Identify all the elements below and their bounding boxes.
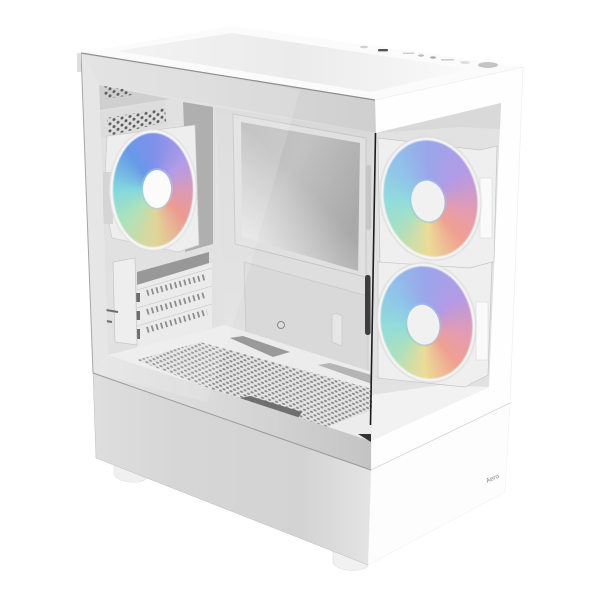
top panel	[81, 26, 523, 100]
pci bar dark	[137, 252, 209, 285]
base: left side	[93, 373, 371, 565]
standoff bracket	[332, 314, 342, 346]
rear foot	[114, 464, 147, 482]
floor slot one	[230, 336, 290, 357]
tray cutout fade	[241, 122, 360, 271]
right interior floor	[371, 385, 489, 441]
tray lower plate	[244, 262, 368, 380]
front fan two blades	[371, 258, 482, 387]
top I/O ports	[360, 46, 498, 68]
glass corner edge	[370, 133, 376, 425]
front fan one	[380, 138, 482, 261]
right interior ceiling	[376, 103, 501, 133]
rear panel	[99, 85, 215, 355]
glass top band	[81, 53, 376, 133]
base right seam	[371, 403, 510, 470]
rear fan blades	[113, 133, 193, 247]
right window interior	[371, 103, 501, 441]
front foot	[333, 552, 368, 571]
pci slot covers	[137, 263, 212, 348]
rear top vent	[99, 85, 170, 138]
glass base seam	[93, 373, 371, 470]
rear fan hub	[143, 170, 171, 208]
left screws	[106, 310, 118, 322]
front fan one hub	[408, 178, 448, 224]
cable slot	[365, 275, 370, 335]
top glass inset	[117, 33, 470, 92]
glass left edge	[81, 53, 93, 373]
motherboard tray	[215, 107, 372, 390]
logo text: Aero	[485, 473, 501, 485]
glass sheen	[81, 53, 300, 402]
pci bracket	[113, 258, 137, 345]
gray opening beside rear fan	[183, 102, 213, 252]
rear hinge tab	[77, 53, 81, 72]
rear fan ribs	[103, 172, 113, 224]
floor slot two	[318, 363, 372, 384]
front fan two bracket	[378, 262, 492, 387]
base: front side	[368, 403, 510, 565]
rear fan bracket	[104, 125, 199, 252]
floor	[108, 325, 372, 441]
front fan two hub	[404, 302, 443, 347]
side slot	[366, 165, 371, 230]
glass lower band	[93, 355, 371, 470]
front fan ribs	[476, 178, 492, 360]
rear fan	[110, 130, 197, 250]
floor slot three	[240, 396, 302, 418]
tray cutout frame	[233, 114, 366, 277]
glass left band	[81, 53, 108, 373]
front fan one blades	[374, 132, 487, 265]
corner clip	[358, 434, 371, 442]
floor perforation	[137, 342, 372, 427]
front fan one bracket	[378, 138, 497, 268]
grommet	[278, 322, 284, 328]
glass top edge	[81, 53, 375, 100]
tray cutout	[241, 122, 360, 271]
right side white frame	[371, 67, 523, 470]
left window interior	[99, 85, 376, 441]
front fan two	[378, 262, 477, 383]
